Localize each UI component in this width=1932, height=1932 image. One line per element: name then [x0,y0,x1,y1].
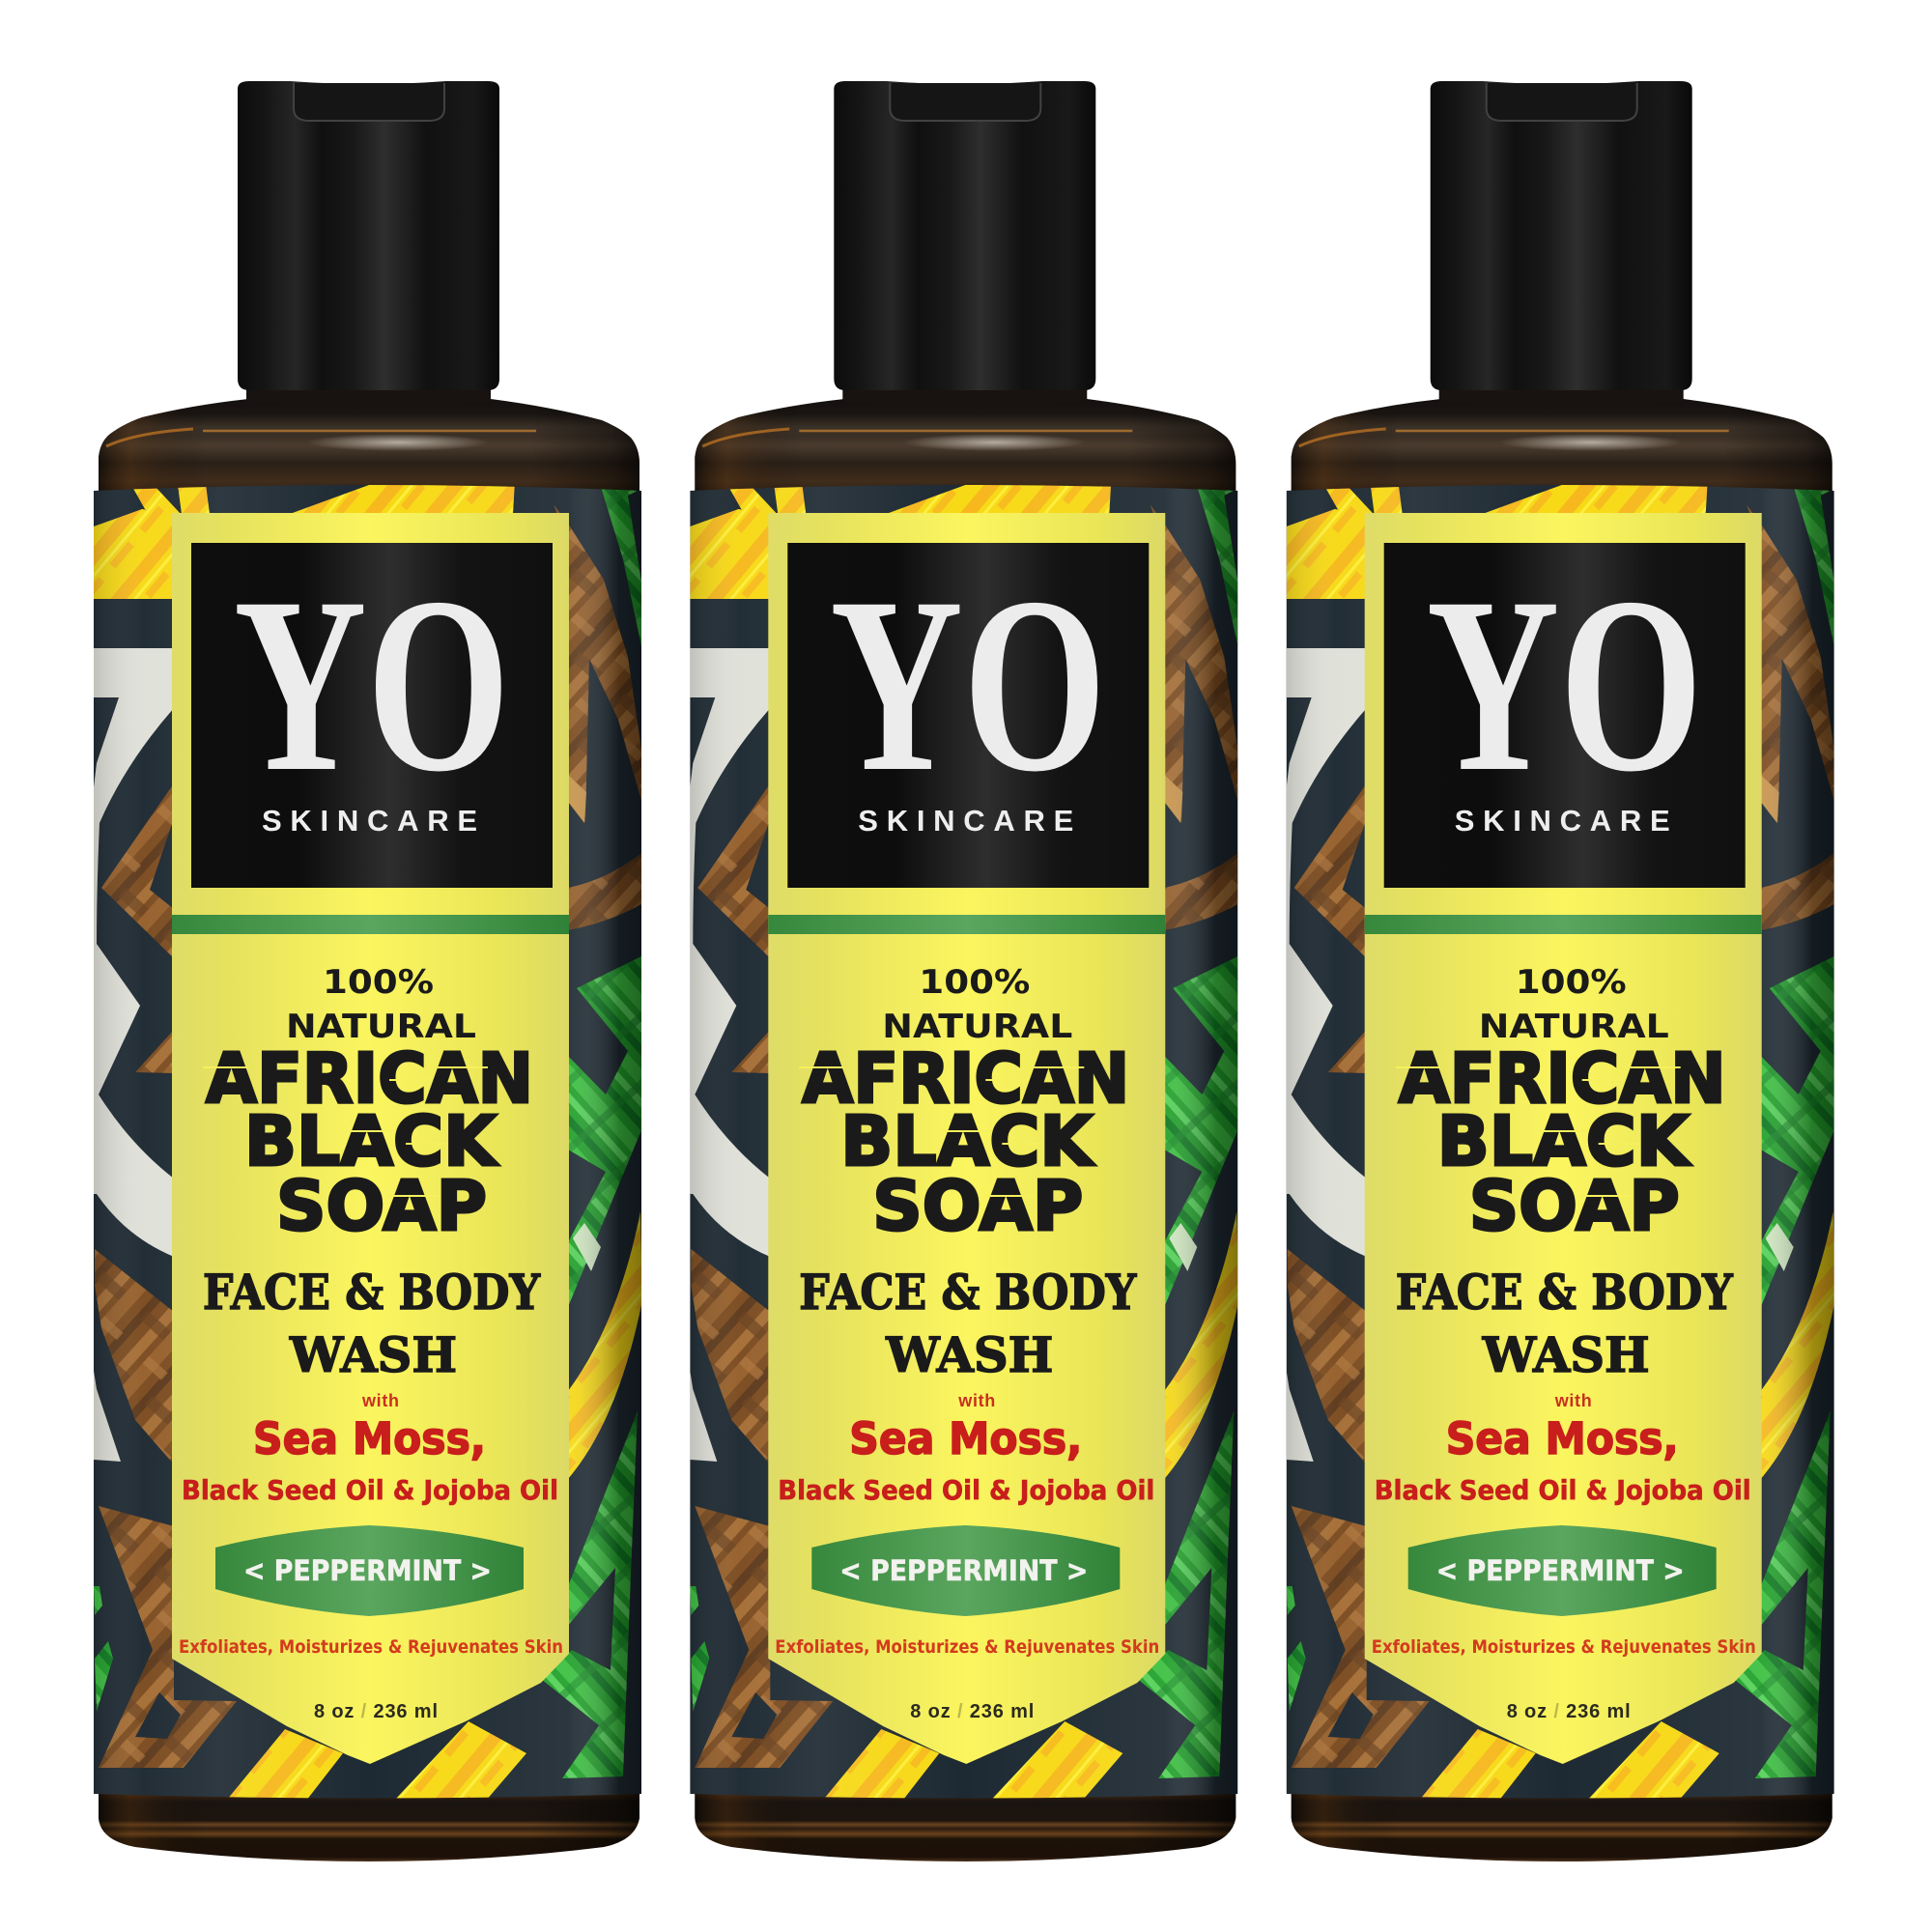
product name: AFRICAN: AFRICAN [1399,1038,1726,1119]
product type: WASH: WASH [885,1326,1053,1383]
product name: SOAP: SOAP [872,1166,1083,1246]
logo: YO: YO [1427,546,1703,824]
benefits line: Exfoliates, Moisturizes & Rejuvenates Skin [179,1636,563,1658]
product type: FACE & BODY: FACE & BODY [799,1264,1137,1321]
volume: 8 oz / 236 ml [1507,1701,1631,1722]
product type: FACE & BODY: FACE & BODY [1396,1264,1734,1321]
ingredients: Sea Moss: Sea Moss, [849,1413,1082,1464]
bottle artwork: cap, glass body, patterned label, yellow panel [87,81,647,1861]
product name: BLACK: BLACK [840,1101,1095,1181]
claim: 100%: 100% [323,963,434,1002]
benefits line: Exfoliates, Moisturizes & Rejuvenates Skin [1372,1636,1756,1658]
product type: FACE & BODY: FACE & BODY [203,1264,541,1321]
bottle artwork: cap, glass body, patterned label, yellow panel [1280,81,1840,1861]
logo: YO: YO [234,546,510,824]
volume: 8 oz / 236 ml [314,1701,438,1722]
product name: AFRICAN: AFRICAN [206,1038,533,1119]
product type: WASH: WASH [289,1326,457,1383]
ingredients: oils: Black Seed Oil & Jojoba Oil [1375,1474,1751,1506]
stencil cuts [799,1066,1084,1197]
product name: BLACK: BLACK [244,1101,499,1181]
product name: AFRICAN: AFRICAN [802,1038,1129,1119]
ingredients: with: with [957,1391,995,1410]
claim: NATURAL: NATURAL [286,1008,476,1046]
bottle artwork: cap, glass body, patterned label, yellow panel [683,81,1243,1861]
ingredients: with: with [361,1391,399,1410]
bottle 3 [1280,81,1840,1861]
bottle 1 [87,81,647,1861]
ingredients: oils: Black Seed Oil & Jojoba Oil [182,1474,558,1506]
ingredients: Sea Moss: Sea Moss, [253,1413,486,1464]
product name: SOAP: SOAP [276,1166,487,1246]
logo: SKINCARE: SKINCARE [262,804,477,838]
ingredients: with: with [1554,1391,1592,1410]
ingredients: Sea Moss: Sea Moss, [1446,1413,1679,1464]
volume: 8 oz / 236 ml [910,1701,1034,1722]
ingredients: oils: Black Seed Oil & Jojoba Oil [778,1474,1154,1506]
claim: 100%: 100% [1516,963,1627,1002]
stencil cuts [203,1066,488,1197]
stencil cuts [1396,1066,1681,1197]
logo: YO: YO [830,546,1106,824]
claim: NATURAL: NATURAL [882,1008,1072,1046]
product name: SOAP: SOAP [1469,1166,1680,1246]
logo: SKINCARE: SKINCARE [1455,804,1670,838]
scent badge text: < PEPPERMINT > [839,1554,1088,1587]
bottle 2 [683,81,1243,1861]
product name: BLACK: BLACK [1437,1101,1692,1181]
claim: 100%: 100% [919,963,1030,1002]
product type: WASH: WASH [1482,1326,1650,1383]
scent badge text: < PEPPERMINT > [1436,1554,1685,1587]
claim: NATURAL: NATURAL [1479,1008,1669,1046]
benefits line: Exfoliates, Moisturizes & Rejuvenates Skin [775,1636,1159,1658]
scent badge text: < PEPPERMINT > [243,1554,492,1587]
logo: SKINCARE: SKINCARE [858,804,1073,838]
